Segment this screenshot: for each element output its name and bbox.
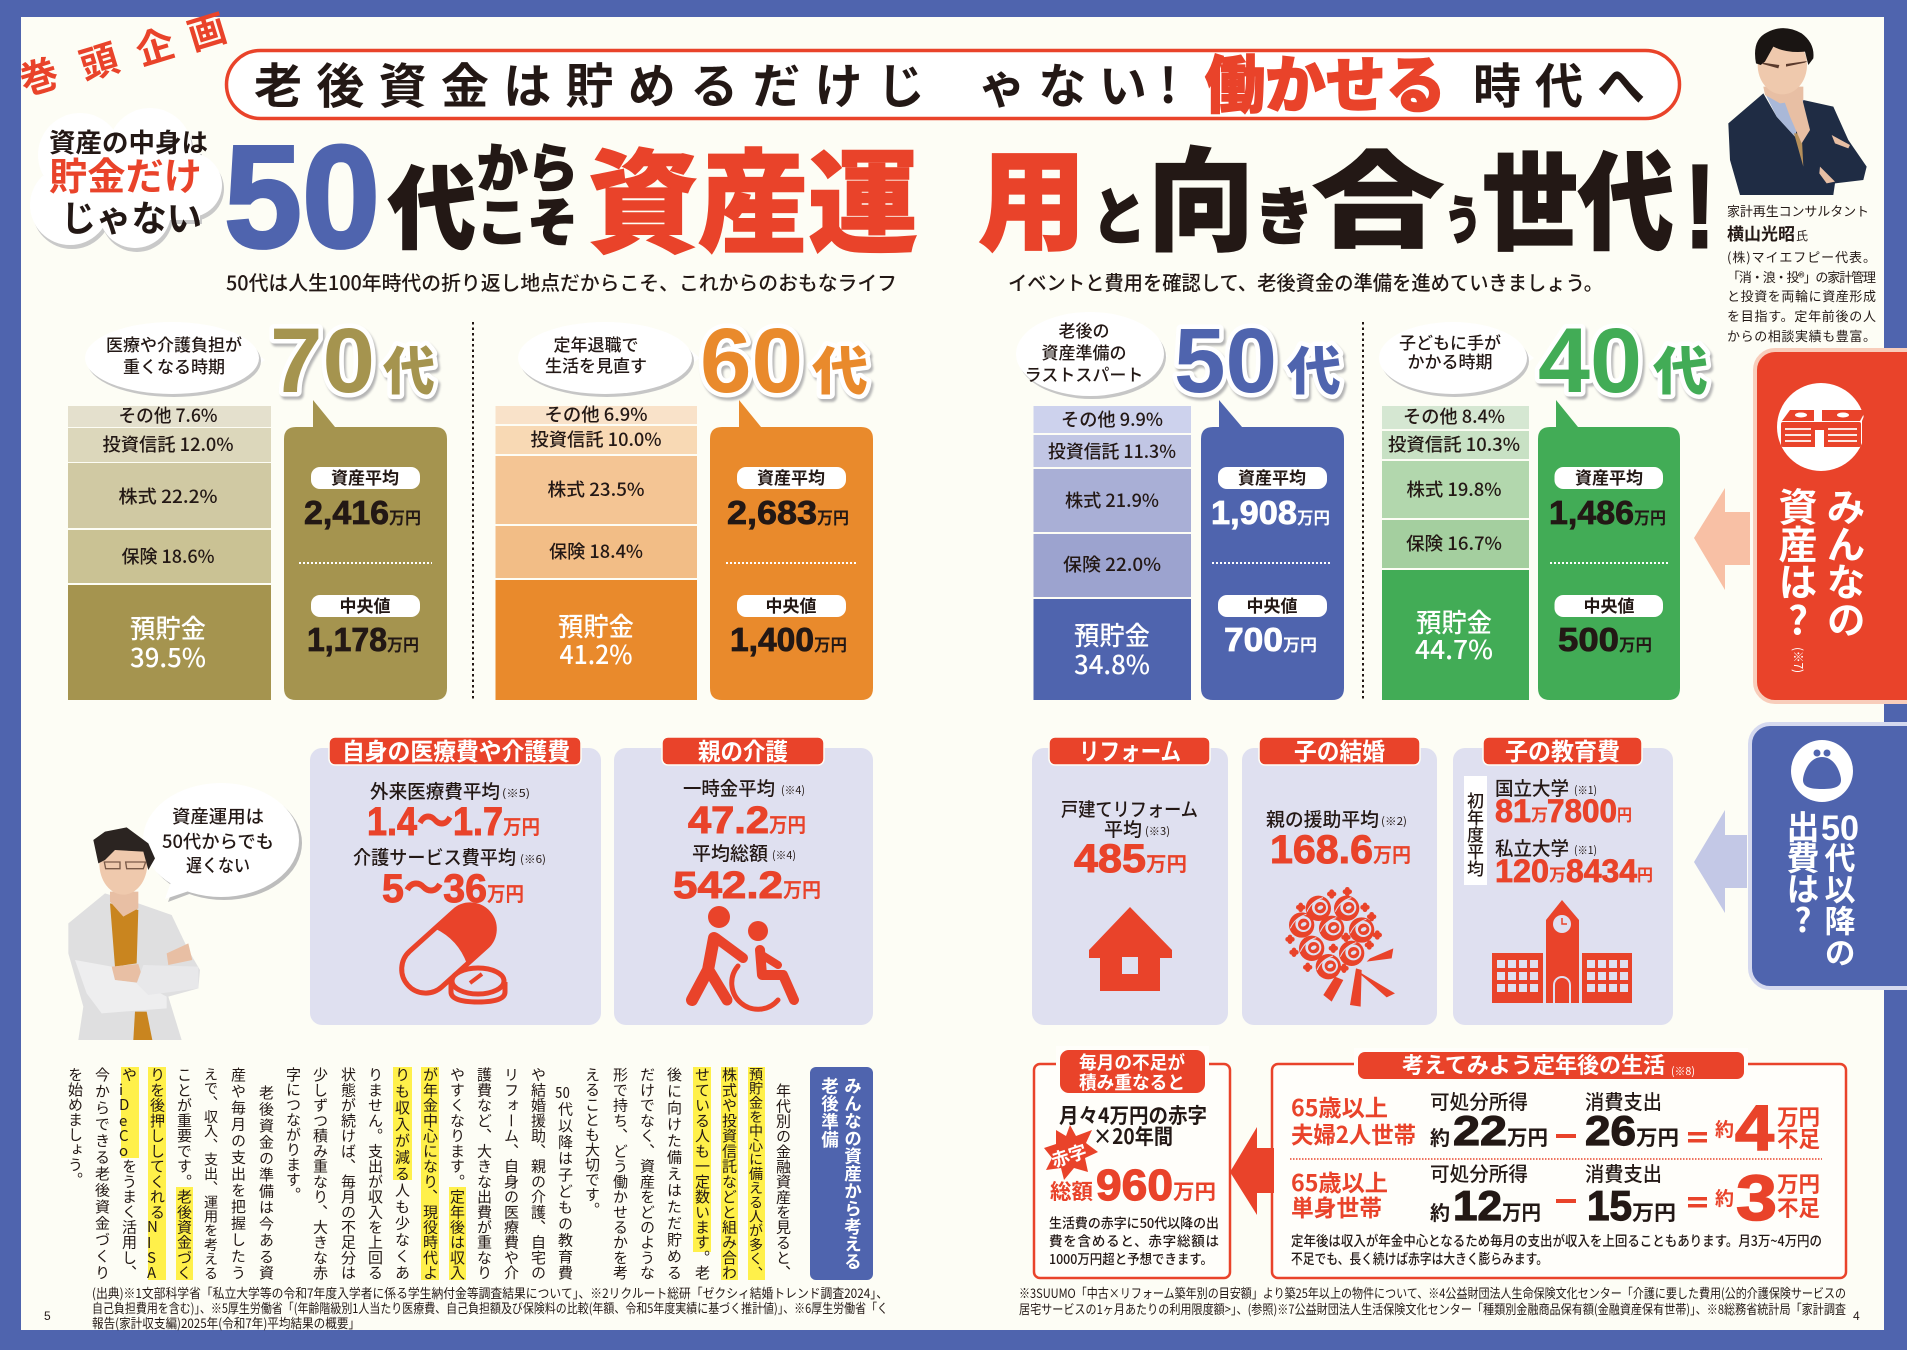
50代 stacked bar: 投資信託 11.3% xyxy=(1048,438,1176,464)
icon: school building xyxy=(1492,900,1632,1003)
panel: 40代 xyxy=(1379,310,1708,700)
60代 stacked bar: 投資信託 10.0% xyxy=(530,426,662,452)
40代 average card xyxy=(1538,400,1680,700)
tag: みんなの資産から考える老後準備 xyxy=(810,1067,873,1280)
panel: 子の教育費: 万 xyxy=(1549,861,1566,886)
main headline: 用 xyxy=(978,113,1086,273)
panel: monthly deficit: 1000万円超と予想できます。 xyxy=(1049,1248,1213,1268)
60代 heading xyxy=(700,310,868,412)
body text columns: 護費など、大きな出費が重なり xyxy=(474,1067,495,1280)
panel: 親の介護: 万円 xyxy=(783,874,821,903)
40代 heading xyxy=(1538,310,1708,412)
panel: 親の介護: 一時金平均 xyxy=(683,774,775,801)
40代 average card: 1,486 xyxy=(1549,494,1634,531)
panel: monthly deficit: ×20年間 xyxy=(1093,1121,1173,1151)
40代 speech bubble: かかる時期 xyxy=(1408,348,1492,373)
panel: 自身の医療費や介護費: 万円 xyxy=(487,878,524,907)
body text columns: りも収入が減る人も少なくあ xyxy=(392,1067,413,1280)
row: single household: 3 xyxy=(1736,1162,1777,1234)
side tab: みんなの資産は? xyxy=(1755,350,1907,702)
row: single household: 万円 xyxy=(1502,1197,1541,1227)
body text highlights xyxy=(121,1067,765,1280)
main headline: 資産運 xyxy=(588,114,918,276)
subheading: 50代は人生100年時代の折り返し地点だからこそ、これからのおもなライフ xyxy=(226,267,897,296)
panel: リフォーム: 平均 xyxy=(1104,815,1142,842)
arrow: assets to generations xyxy=(1694,488,1750,590)
main headline: 50 xyxy=(224,115,380,278)
label: 初年度平均: 初年度平均 xyxy=(1463,792,1488,878)
icon: stack of banknotes xyxy=(1777,383,1866,471)
body text columns: 老後資金の準備は今ある資 xyxy=(256,1085,277,1280)
50代 average card: 資産平均 xyxy=(1238,464,1306,489)
cloud callout: 貯金だけ xyxy=(49,146,202,201)
panel: 子の教育費 xyxy=(1453,732,1673,1025)
60代 stacked bar: 株式 23.5% xyxy=(548,476,645,502)
arrow: expenses to life events xyxy=(1694,810,1747,913)
page number left: 5 xyxy=(44,1309,51,1323)
body text columns: 少しずつ積み重なり、大きな赤 xyxy=(310,1067,331,1280)
expert caption: 家計再生コンサルタント xyxy=(1727,201,1869,220)
row: couple household: 約 xyxy=(1715,1115,1734,1142)
panel: リフォーム: (※3) xyxy=(1145,823,1170,839)
panel: 子の教育費: 7800 xyxy=(1547,793,1617,829)
title pill: 老後資金は貯めるだけじ xyxy=(254,47,925,117)
panel: life after retirement xyxy=(1272,1048,1846,1278)
50代 stacked bar: 株式 21.9% xyxy=(1065,487,1159,513)
body text columns: 形で持ち、どう働かせるかを考 xyxy=(610,1067,631,1280)
main headline: 代 xyxy=(388,137,476,267)
40代 average card: 中央値 xyxy=(1584,592,1634,617)
panel: monthly deficit: 費を含めると、赤字総額は xyxy=(1049,1230,1219,1250)
expert caption: 氏 xyxy=(1796,227,1808,244)
row: couple household: 22 xyxy=(1453,1107,1507,1154)
row: single household: 消費支出 xyxy=(1585,1158,1662,1187)
main headline: こそ xyxy=(477,181,578,256)
panel: 自身の医療費や介護費: 1.4〜1.7 xyxy=(367,800,503,844)
body text columns: やすくなります。定年後は収入 xyxy=(447,1067,468,1280)
row: couple household xyxy=(1291,1086,1820,1164)
60代 stacked bar xyxy=(496,401,697,700)
panel: 自身の医療費や介護費: (※6) xyxy=(520,851,546,867)
70代 speech bubble xyxy=(85,322,265,397)
panel: リフォーム: リフォーム xyxy=(1079,732,1181,767)
60代 average card: 2,683 xyxy=(727,494,817,531)
row: couple household: 65歳以上 xyxy=(1291,1089,1388,1123)
40代 stacked bar xyxy=(1382,403,1529,700)
main headline: き xyxy=(1254,167,1314,257)
side tab: 50代以降の出費は?: 代以降の xyxy=(1818,842,1862,968)
50代 average card: 1,908 xyxy=(1211,494,1297,531)
50代 heading xyxy=(1174,310,1341,412)
row: couple household: 消費支出 xyxy=(1585,1086,1662,1115)
body text columns: を始めましょう。 xyxy=(65,1067,86,1187)
60代 stacked bar: 41.2% xyxy=(560,635,632,672)
body text columns: 後に向けた備えはただ貯める xyxy=(664,1067,685,1280)
50代 heading: 50 xyxy=(1174,310,1277,412)
50代 speech bubble: 老後の xyxy=(1058,317,1110,342)
70代 stacked bar: 株式 22.2% xyxy=(118,483,218,509)
title pill: ゃない! xyxy=(978,47,1177,117)
panel: 親の介護: 親の介護 xyxy=(698,732,788,767)
row: couple household: 夫婦2人世帯 xyxy=(1291,1116,1416,1150)
panel: 親の介護: 平均総額 xyxy=(692,839,768,866)
panel: 子の教育費: 国立大学 xyxy=(1495,774,1569,801)
body text columns: 年代別の金融資産を見ると、 xyxy=(773,1083,794,1280)
row: single household: 万円 xyxy=(1632,1197,1676,1227)
panel: monthly deficit xyxy=(1034,1046,1230,1278)
panel: 子の教育費: (※1) xyxy=(1574,782,1597,798)
row: single household: 約 xyxy=(1715,1184,1734,1211)
row: couple household: 万円 xyxy=(1777,1100,1820,1132)
body text columns: えることも大切です。 xyxy=(582,1067,603,1217)
70代 average card: 万円 xyxy=(389,504,421,529)
cloud callout: じゃない xyxy=(61,190,202,242)
expert caption: (株)マイエフピー代表。 xyxy=(1727,247,1876,266)
tag: みんなの資産から考える老後準備: みんなの資産から考える xyxy=(840,1077,866,1270)
kicker: 巻頭企画 xyxy=(12,0,232,106)
40代 heading: 40 xyxy=(1538,310,1642,412)
40代 stacked bar: 保険 16.7% xyxy=(1406,530,1502,556)
panel: monthly deficit: 積み重なると xyxy=(1079,1069,1185,1095)
side tab: 50代以降の出費は?: 出費は? xyxy=(1779,810,1827,936)
body text columns: えで、収入、支出、運用を考える xyxy=(201,1067,221,1280)
burst: 赤字 xyxy=(1044,1125,1098,1180)
panel: life after retirement: (※8) xyxy=(1671,1063,1695,1079)
50代 stacked bar: 預貯金 xyxy=(1074,616,1150,653)
50代 average card: 万円 xyxy=(1283,631,1317,656)
panel: 子の結婚: (※2) xyxy=(1381,813,1407,829)
60代 speech bubble: 生活を見直す xyxy=(545,352,647,377)
60代 average card xyxy=(710,400,873,700)
40代 speech bubble: 子どもに手が xyxy=(1399,329,1501,354)
70代 heading: 代 xyxy=(383,330,435,405)
body text columns: 字につながります。 xyxy=(283,1067,304,1202)
row: single household xyxy=(1291,1158,1820,1234)
50代 stacked bar: その他 9.9% xyxy=(1061,406,1163,432)
panel: life after retirement: 不足でも、長く続けば赤字は大きく膨らみます。 xyxy=(1291,1249,1548,1269)
row: single household: 15 xyxy=(1587,1182,1632,1229)
illustration: consultant xyxy=(68,827,200,1040)
70代 average card: 資産平均 xyxy=(331,464,399,489)
row: single household: 単身世帯 xyxy=(1291,1189,1382,1223)
main headline: 向 xyxy=(1148,112,1254,274)
speech bubble: 資産運用は xyxy=(172,803,264,829)
40代 stacked bar: 44.7% xyxy=(1415,630,1493,667)
row: single household: 不足 xyxy=(1777,1191,1820,1223)
panel: 子の教育費: 子の教育費 xyxy=(1505,732,1620,767)
panel: 子の結婚: 子の結婚 xyxy=(1294,732,1385,767)
panel: 自身の医療費や介護費 xyxy=(310,732,601,1025)
40代 heading: 代 xyxy=(1653,330,1708,405)
panel: 自身の医療費や介護費: (※5) xyxy=(502,785,530,801)
row: couple household: 約 xyxy=(1430,1122,1450,1151)
panel: リフォーム xyxy=(1032,732,1228,1025)
50代 average card: 中央値 xyxy=(1246,592,1298,617)
expert caption: 「消・浪・投®」の家計管理 xyxy=(1727,267,1876,286)
kicker: 巻頭企画: 企 xyxy=(128,12,180,76)
70代 stacked bar: その他 7.6% xyxy=(118,402,218,428)
60代 stacked bar: その他 6.9% xyxy=(544,401,648,427)
panel: monthly deficit: 960 xyxy=(1096,1161,1173,1210)
panel: 60代 xyxy=(496,310,873,700)
70代 speech bubble: 重くなる時期 xyxy=(123,353,225,378)
70代 average card: 中央値 xyxy=(340,592,390,617)
panel: 自身の医療費や介護費: 外来医療費平均 xyxy=(370,777,500,804)
expert caption: を目指す。定年前後の人 xyxy=(1727,306,1876,325)
40代 average card: 資産平均 xyxy=(1575,464,1643,489)
row: couple household: 可処分所得 xyxy=(1430,1086,1528,1115)
main headline: と xyxy=(1092,167,1146,257)
divider xyxy=(472,322,474,700)
side tab: 50代以降の出費は? xyxy=(1750,724,1907,988)
40代 average card: 500 xyxy=(1558,621,1619,658)
expert caption: と投資を両輪に資産形成 xyxy=(1727,286,1876,305)
main headline: う xyxy=(1445,179,1481,254)
70代 stacked bar: 投資信託 12.0% xyxy=(102,431,234,457)
panel: 自身の医療費や介護費: 万円 xyxy=(503,811,540,840)
panel: 子の教育費: 120 xyxy=(1495,853,1549,889)
panel: 子の結婚: 万円 xyxy=(1373,839,1411,868)
panel: 子の教育費: 円 xyxy=(1617,801,1632,826)
panel: 子の教育費: 81 xyxy=(1495,793,1531,829)
body text columns: りを後押ししてくれる N I S A xyxy=(147,1067,168,1280)
expert caption: 横山光昭 xyxy=(1727,220,1795,245)
panel: 親の介護: 万円 xyxy=(769,809,806,838)
panel: 親の介護: (※4) xyxy=(772,847,796,863)
60代 stacked bar: 預貯金 xyxy=(558,607,634,644)
subheading xyxy=(226,267,1603,296)
panel: 自身の医療費や介護費: 5〜36 xyxy=(382,867,487,911)
panel: 親の介護: (※4) xyxy=(781,782,805,798)
panel: リフォーム: 戸建てリフォーム xyxy=(1061,795,1198,822)
icon: house xyxy=(1089,907,1172,991)
70代 stacked bar xyxy=(68,402,271,700)
side tab: みんなの資産は?: (※7) xyxy=(1790,647,1807,673)
70代 average card xyxy=(284,400,447,700)
side tab: 50代以降の出費は?: 50 xyxy=(1821,809,1859,848)
70代 average card: 1,178 xyxy=(307,621,387,658)
title pill: 時代へ xyxy=(1473,47,1645,117)
cloud callout xyxy=(30,108,224,252)
row: single household: 約 xyxy=(1430,1197,1450,1226)
40代 average card: 万円 xyxy=(1619,631,1652,656)
expert portrait xyxy=(1728,28,1867,195)
body text columns: が年金中心になり、現役時代よ xyxy=(420,1067,441,1280)
panel: リフォーム: 万円 xyxy=(1146,848,1187,877)
70代 average card: 万円 xyxy=(387,631,419,656)
panel: monthly deficit: 毎月の不足が xyxy=(1079,1049,1185,1075)
70代 stacked bar: 保険 18.6% xyxy=(122,543,215,569)
body text columns: 今からできる老後資金づくり xyxy=(92,1067,113,1280)
40代 stacked bar: 預貯金 xyxy=(1416,603,1492,640)
body text columns: リフォーム、自身の医療費や介 xyxy=(501,1067,522,1280)
panel: 子の結婚: 親の援助平均 xyxy=(1266,805,1379,832)
footnotes left: 自己負担費用を含む)」、※5厚生労働省「(年齢階級別1人当たり医療費、自己負担額及び保険料の比較(年額、令和5年度実績に基づく推計値)」、※6厚生労働省「く xyxy=(92,1298,888,1317)
60代 average card: 資産平均 xyxy=(757,464,825,489)
60代 average card: 万円 xyxy=(817,504,849,529)
side tab: みんなの資産は?: みんなの xyxy=(1818,487,1874,639)
40代 speech bubble xyxy=(1379,322,1534,397)
panel: life after retirement: 定年後は収入が年金中心となるため毎月の支出が収入を上回ることもあります。月3万~4万円の xyxy=(1291,1231,1822,1251)
body text columns: せている人も一定数います。老 xyxy=(692,1067,713,1280)
row: couple household: 万円 xyxy=(1507,1122,1548,1152)
burst: 赤字: 赤字 xyxy=(1048,1137,1090,1173)
row: single household: 万円 xyxy=(1777,1167,1820,1199)
60代 speech bubble xyxy=(518,322,700,397)
main headline: 世代 xyxy=(1482,118,1674,272)
body text columns: 預貯金を中心に備える人が多く、 xyxy=(746,1067,766,1280)
panel: 親の介護: 47.2 xyxy=(688,800,769,842)
icon: carer and wheelchair xyxy=(692,906,794,1009)
40代 stacked bar: その他 8.4% xyxy=(1403,403,1505,429)
icon: capsule and tablet xyxy=(392,895,505,1003)
panel: 子の結婚: 168.6 xyxy=(1270,828,1373,872)
50代 average card: 700 xyxy=(1224,621,1283,658)
kicker: 巻頭企画: 頭 xyxy=(72,27,124,91)
70代 stacked bar: 預貯金 xyxy=(130,609,206,646)
side tab: みんなの資産は?: 資産は? xyxy=(1770,487,1826,639)
50代 stacked bar: 34.8% xyxy=(1074,645,1150,682)
50代 speech bubble: ラストスパート xyxy=(1025,361,1143,386)
60代 stacked bar: 保険 18.4% xyxy=(549,538,643,564)
panel: 子の教育費: 8434 xyxy=(1566,853,1637,889)
footnotes right xyxy=(1019,1283,1846,1318)
50代 speech bubble xyxy=(1016,312,1168,399)
body text columns: 株式や投資信託などと組み合わ xyxy=(719,1067,740,1280)
body text columns: や i D e C o をうまく活用し、 xyxy=(119,1067,140,1280)
40代 average card: 万円 xyxy=(1634,504,1666,529)
icon: bouquet xyxy=(1285,887,1395,1007)
60代 average card: 1,400 xyxy=(730,621,814,658)
60代 average card: 万円 xyxy=(814,631,847,656)
row: couple household: 26 xyxy=(1585,1107,1636,1154)
60代 heading: 60 xyxy=(700,310,803,412)
cloud callout: 資産の中身は xyxy=(49,123,208,160)
panel: 親の介護: 542.2 xyxy=(673,865,783,907)
panel: リフォーム: 485 xyxy=(1074,837,1146,881)
main headline xyxy=(224,112,1715,278)
row: single household: 65歳以上 xyxy=(1291,1164,1388,1198)
title pill: 働かせる xyxy=(1205,35,1446,125)
main headline: から xyxy=(477,127,578,202)
60代 speech bubble: 定年退職で xyxy=(554,331,638,356)
main headline: 合 xyxy=(1312,117,1444,268)
footnotes left: (出典)※1文部科学省「私立大学等の令和7年度入学者に係る学生納付金等調査結果について」、※2リクルート総研「ゼクシィ結婚トレンド調査2024」、 xyxy=(92,1283,888,1302)
tag: みんなの資産から考える老後準備: 老後準備 xyxy=(818,1077,842,1149)
body text columns: 状態が続けば、毎月の不足分は xyxy=(338,1067,359,1280)
50代 average card: 万円 xyxy=(1297,504,1330,529)
expert caption xyxy=(1727,201,1876,345)
arrow: red, to monthly deficit xyxy=(1230,1127,1274,1215)
row: couple household: 4 xyxy=(1735,1092,1774,1164)
body text columns: ことが重要です。老後資金づく xyxy=(174,1067,195,1280)
row: couple household: 不足 xyxy=(1777,1122,1820,1154)
man with speech bubble xyxy=(68,783,302,1040)
panel: 50代 xyxy=(1016,310,1344,700)
70代 heading: 70 xyxy=(270,310,375,412)
panel: monthly deficit: 万円 xyxy=(1173,1176,1216,1206)
panel: 自身の医療費や介護費: 介護サービス費平均 xyxy=(353,843,516,870)
50代 stacked bar: 保険 22.0% xyxy=(1063,551,1161,577)
70代 average card: 2,416 xyxy=(304,494,389,531)
panel: 子の教育費: 円 xyxy=(1637,861,1653,886)
70代 speech bubble: 医療や介護負担が xyxy=(106,331,242,356)
panel: monthly deficit: 月々4万円の赤字 xyxy=(1059,1100,1207,1130)
footnotes left xyxy=(92,1283,888,1332)
40代 stacked bar: 投資信託 10.3% xyxy=(1388,431,1520,457)
panel: 親の介護 xyxy=(614,732,873,1025)
panel: 70代 xyxy=(68,310,447,700)
body text columns: 50 代以降は子どもの教育費 xyxy=(555,1085,576,1280)
panel: 子の結婚 xyxy=(1242,732,1437,1025)
speech bubble: 50代からでも xyxy=(162,828,274,854)
icon: coin purse xyxy=(1791,740,1853,802)
60代 average card: 中央値 xyxy=(766,592,816,617)
main headline: ! xyxy=(1685,141,1715,273)
body text columns: や結婚援助、親の介護、自宅の xyxy=(528,1067,549,1280)
panel: 子の教育費: 私立大学 xyxy=(1495,834,1569,861)
body text columns: りません。支出が収入を上回る xyxy=(365,1067,386,1280)
speech bubble xyxy=(143,783,302,902)
row: single household: 可処分所得 xyxy=(1430,1158,1528,1187)
50代 stacked bar xyxy=(1034,406,1191,700)
speech bubble: 遅くない xyxy=(186,852,250,878)
subheading: イベントと費用を確認して、老後資金の準備を進めていきましょう。 xyxy=(1008,267,1603,296)
panel: 子の教育費: 万 xyxy=(1531,801,1548,826)
divider xyxy=(1362,322,1364,700)
footnotes left: 報告(家計収支編)2025年(令和7年)平均結果の概要」 xyxy=(92,1313,360,1332)
50代 heading: 代 xyxy=(1287,330,1341,405)
70代 heading xyxy=(270,310,435,412)
50代 speech bubble: 資産準備の xyxy=(1042,339,1126,364)
40代 stacked bar: 株式 19.8% xyxy=(1406,476,1502,502)
title pill xyxy=(226,35,1680,125)
60代 heading: 代 xyxy=(812,330,868,405)
70代 stacked bar: 39.5% xyxy=(130,638,206,675)
body text columns: だけでなく、資産をどのような xyxy=(637,1067,658,1280)
panel: 子の教育費: (※1) xyxy=(1574,842,1597,858)
page number right: 4 xyxy=(1853,1309,1860,1323)
panel: 自身の医療費や介護費: 自身の医療費や介護費 xyxy=(342,732,570,767)
kicker: 巻頭企画: 巻 xyxy=(12,42,64,106)
row: couple household: 万円 xyxy=(1636,1122,1679,1152)
50代 average card xyxy=(1201,400,1344,700)
row: single household: 12 xyxy=(1453,1182,1502,1229)
panel: life after retirement: 考えてみよう定年後の生活 xyxy=(1402,1048,1665,1080)
expert caption: からの相談実績も豊富。 xyxy=(1727,326,1876,345)
body text columns: 産や毎月の支出を把握したう xyxy=(228,1067,249,1280)
panel: monthly deficit: 生活費の赤字に50代以降の出 xyxy=(1049,1212,1219,1232)
panel: monthly deficit: 総額 xyxy=(1050,1176,1093,1206)
